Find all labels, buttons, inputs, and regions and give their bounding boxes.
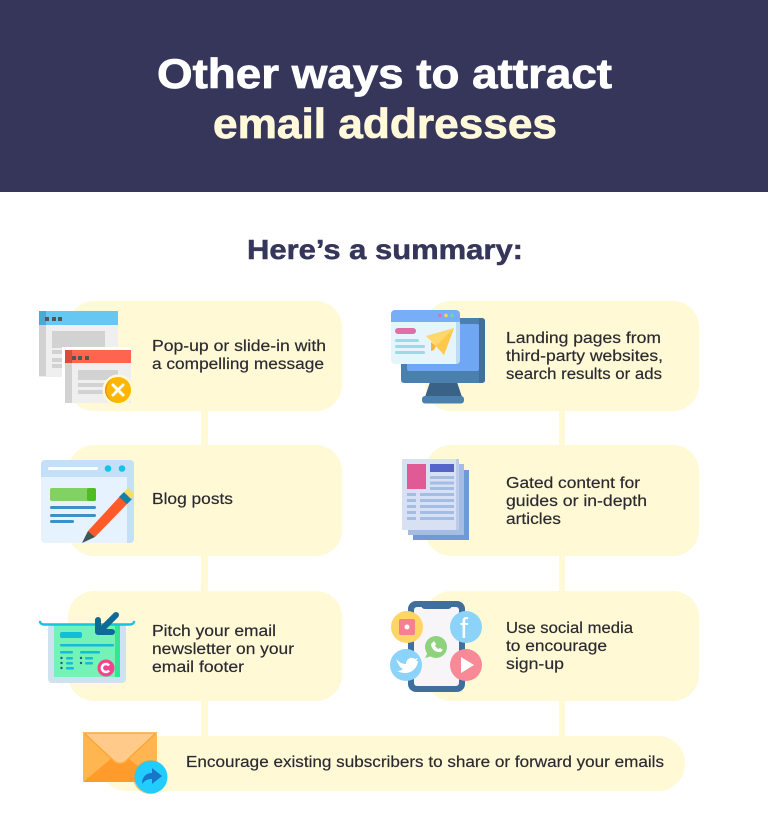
subheading: Here’s a summary: — [247, 234, 523, 265]
panel: landing pages — [391, 301, 699, 411]
text: social media: sign-up — [506, 656, 564, 673]
panel: gated content — [402, 445, 699, 556]
icon: pop-up windows — [39, 311, 134, 406]
text: blog posts: Blog posts — [152, 491, 233, 508]
text: pop-up — [152, 338, 326, 373]
text: share or forward: Encourage existing subscribers to share or forward your emails — [186, 754, 664, 771]
text: gated content: articles — [506, 511, 561, 528]
text: gated content: Gated content for — [506, 475, 640, 492]
panel: email footer — [40, 591, 342, 701]
text: landing pages: Landing pages from — [506, 330, 661, 347]
icon: envelope with forward arrow — [83, 733, 168, 794]
icon: phone with social media: f — [460, 613, 469, 645]
text: social media: to encourage — [506, 638, 607, 655]
icon: blog window with pencil — [41, 460, 134, 543]
title line 2: email addresses — [213, 100, 557, 147]
icon: stacked documents — [402, 459, 469, 540]
header banner — [0, 0, 768, 192]
icon: monitor with paper plane — [391, 310, 485, 404]
text: email footer: Pitch your email — [152, 623, 276, 640]
icon: phone with social media — [390, 601, 482, 692]
icon: newsletter with arrow — [40, 615, 134, 683]
text: landing pages: search results or ads — [506, 366, 662, 383]
text: email footer: newsletter on your — [152, 641, 294, 658]
connectors — [201, 405, 565, 741]
text: landing pages: third-party websites, — [506, 348, 663, 365]
title line 1: Other ways to attract — [157, 50, 612, 97]
text: social media — [506, 620, 633, 673]
text: email footer: email footer — [152, 659, 244, 676]
panel: pop-up — [39, 301, 342, 411]
text: pop-up: a compelling message — [152, 356, 324, 373]
text: gated content — [506, 475, 647, 528]
text: landing pages — [506, 330, 663, 383]
text: pop-up: Pop-up or slide-in with — [152, 338, 326, 355]
text: gated content: guides or in-depth — [506, 493, 647, 510]
panel: share or forward — [83, 733, 685, 794]
text: social media: Use social media — [506, 620, 633, 637]
panel: social media — [390, 591, 699, 701]
panel: blog posts — [41, 445, 342, 556]
text: email footer — [152, 623, 294, 676]
